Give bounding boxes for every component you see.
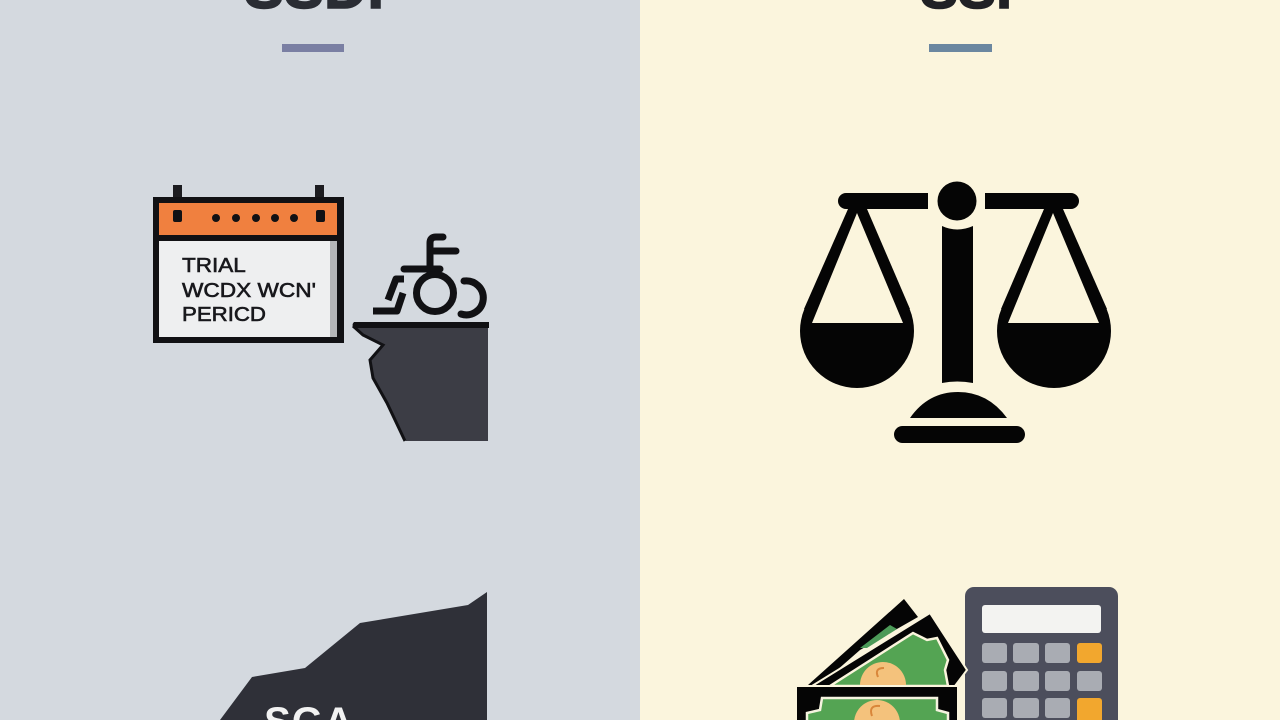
right pan [997, 209, 1111, 388]
panel: SSI [640, 0, 1280, 720]
icon: wheelchair [373, 237, 483, 315]
icon: trial work period calendar [153, 185, 344, 343]
icon: cliff [352, 322, 489, 441]
calendar text: TRIAL [182, 255, 246, 277]
calendar text: WCDX WCN' [182, 280, 316, 302]
calendar text: PERICD [182, 304, 266, 326]
left pan [800, 209, 914, 388]
icon: SGA mountain [220, 592, 487, 720]
icon: banknotes [797, 599, 967, 720]
panel: SSDI [0, 0, 640, 720]
icon: calculator [965, 587, 1118, 720]
icon: balance scale [800, 182, 1111, 443]
heading underline: SSI [929, 44, 992, 52]
heading underline: SSDI [282, 44, 344, 52]
